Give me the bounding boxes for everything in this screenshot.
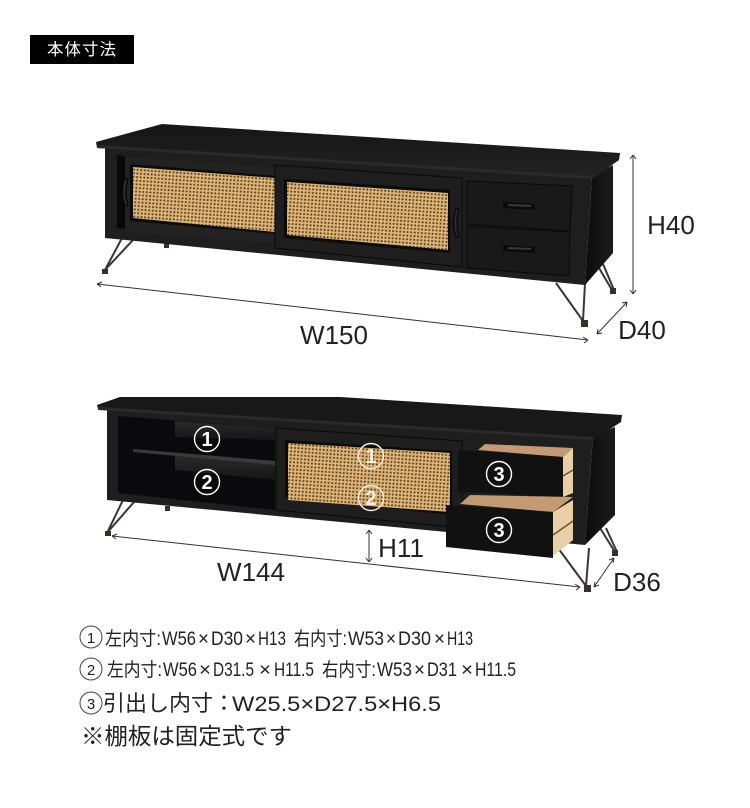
cabinet front	[107, 408, 593, 545]
marker 3 on upper drawer	[486, 462, 512, 486]
marker 3 on lower drawer: 3	[493, 520, 505, 542]
note line 1: ×	[245, 629, 256, 650]
sliding door	[276, 428, 462, 528]
marker 2 on door	[358, 486, 384, 510]
label: W144: W144	[217, 557, 285, 587]
arrow: depth 36	[594, 558, 614, 587]
legs	[104, 238, 614, 321]
feet	[105, 506, 618, 592]
marker 1 on shelf: 1	[201, 429, 213, 451]
note line 2: ×	[259, 660, 271, 681]
note line 1: W53	[348, 629, 384, 650]
label: H40: H40	[647, 210, 695, 240]
marker 1 on door	[358, 444, 384, 468]
note line 2	[80, 658, 516, 681]
note line 1: ×	[434, 629, 445, 650]
leg feet	[102, 243, 616, 327]
dimension arrows: open board	[112, 530, 614, 590]
note line 4: ※棚板は固定式です	[81, 723, 292, 749]
marker 2 on shelf: 2	[201, 472, 213, 494]
note line 1: D30	[398, 629, 431, 650]
furniture: open TV board	[97, 397, 622, 592]
note line 2: H11.5	[475, 660, 516, 681]
lower open drawer	[446, 495, 573, 558]
heading label: 本体寸法: 本体寸法	[47, 40, 117, 59]
note line 1: 1	[87, 630, 95, 647]
note line 2: 2	[87, 662, 95, 679]
marker 2 on shelf	[194, 470, 220, 494]
note line 3	[80, 691, 441, 716]
note line 3: 3	[87, 696, 95, 713]
upper open drawer	[458, 444, 573, 497]
drawer bottom	[467, 226, 570, 276]
note line 2: W53	[377, 660, 412, 681]
label: H11: H11	[378, 533, 424, 563]
cabinet side	[585, 427, 615, 545]
sliding door right	[275, 165, 462, 267]
note line 3: W25.5×D27.5×H6.5	[232, 693, 441, 716]
label: D40: D40	[618, 315, 666, 345]
arrow: leg clearance 11	[366, 530, 372, 562]
marker 2 on door: 2	[365, 488, 377, 510]
marker 1 on shelf	[194, 426, 220, 452]
note line 2: ×	[414, 660, 425, 681]
top board	[97, 397, 622, 440]
note line 2: D31.5	[213, 660, 254, 681]
marker 1 on door: 1	[365, 446, 377, 468]
notes: inner dimensions	[80, 626, 516, 749]
cabinet side	[585, 165, 613, 285]
arrow: depth 40	[597, 302, 627, 334]
note line 2: D31	[427, 660, 457, 681]
sliding door left	[117, 155, 277, 243]
furniture: closed TV board	[96, 124, 620, 327]
note line 3: ：	[213, 691, 235, 716]
note line 1	[80, 626, 473, 650]
marker 3 on upper drawer: 3	[493, 464, 505, 486]
drawer top	[467, 181, 572, 231]
top board	[96, 124, 620, 179]
note line 1: 右内寸:	[294, 628, 347, 650]
arrow: width 144	[112, 534, 580, 590]
arrow: width 150	[97, 282, 588, 343]
note line 1: ×	[198, 629, 209, 650]
note line 1: D30	[211, 629, 243, 650]
open shelf compartment	[118, 416, 275, 510]
cabinet front	[105, 146, 592, 285]
note line 1: 左内寸:	[105, 628, 161, 650]
note line 1: W56	[162, 629, 196, 650]
legs	[106, 500, 617, 586]
heading label: 本体寸法	[30, 35, 134, 64]
note line 2: H11.5	[274, 660, 314, 681]
note line 2: ×	[461, 660, 473, 681]
label: D36: D36	[613, 567, 661, 597]
note line 1: H13	[258, 629, 286, 650]
note line 1: ×	[386, 629, 396, 650]
note line 2: W56	[163, 660, 197, 681]
dimension arrows: closed board	[97, 155, 636, 343]
note line 3: 引出し内寸	[103, 691, 213, 716]
note line 1: H13	[447, 629, 473, 650]
note line 2: ×	[199, 660, 211, 681]
label: W150: W150	[300, 320, 368, 350]
note line 2: 右内寸:	[322, 659, 376, 681]
arrow: height 40	[630, 155, 636, 294]
note line 2: 左内寸:	[107, 659, 162, 681]
marker 3 on lower drawer	[486, 518, 512, 542]
